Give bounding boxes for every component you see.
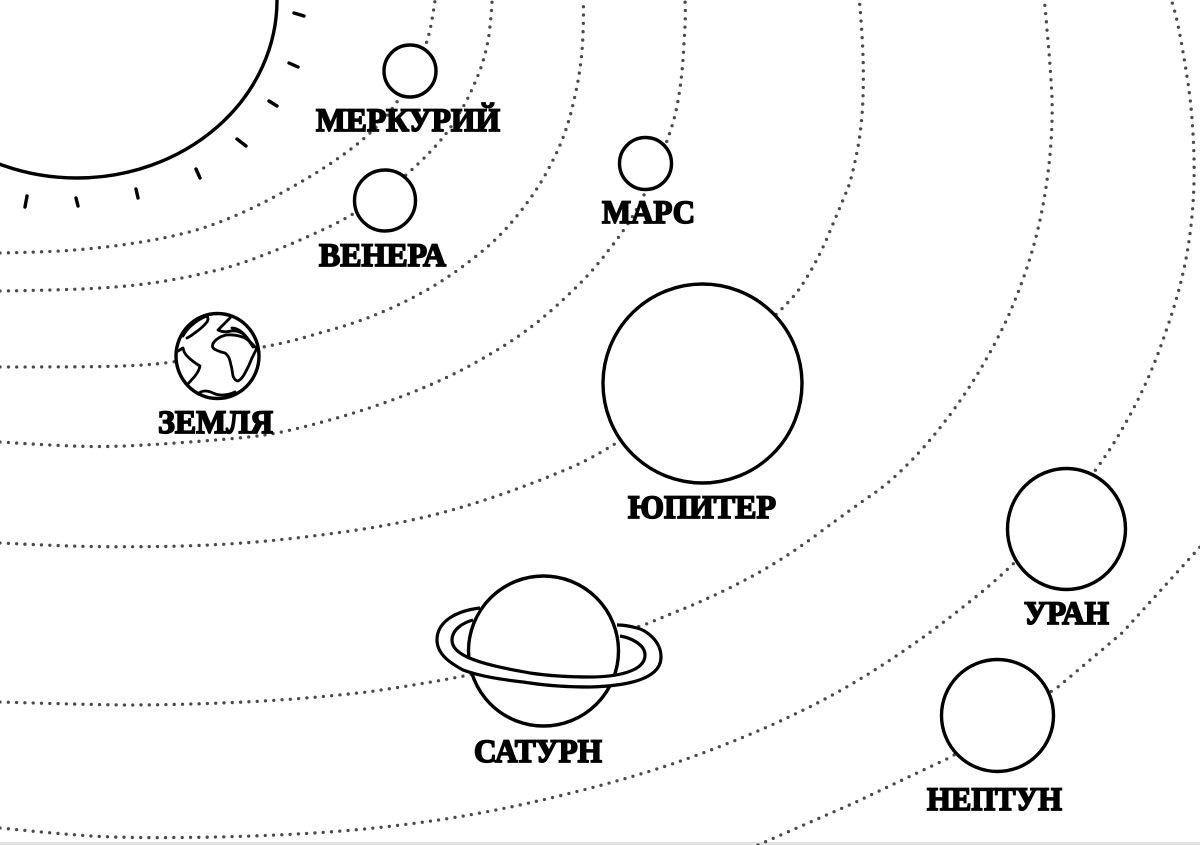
- orbit: venus: [0, 0, 492, 291]
- planet: Mars: МАРС: [602, 195, 695, 231]
- planet: Saturn: [437, 576, 661, 770]
- sun rays: [25, 13, 304, 207]
- planet: Mars: [602, 138, 695, 231]
- planet: Neptune: НЕПТУН: [927, 782, 1062, 818]
- planet: Neptune: [927, 660, 1062, 818]
- saturn ring back fill: [437, 608, 661, 687]
- planet: Jupiter: [603, 284, 802, 526]
- orbit: jupiter: [0, 0, 863, 547]
- planet: Jupiter: ЮПИТЕР: [628, 490, 776, 526]
- sun: [0, 0, 304, 207]
- saturn ring front band: [437, 608, 661, 687]
- planet: Uranus: [1008, 468, 1126, 632]
- orbit: earth: [0, 0, 584, 367]
- planet: Mercury: [316, 45, 500, 139]
- saturn ring outer edge: [437, 608, 661, 687]
- planet: Mercury: МЕРКУРИЙ: [316, 102, 500, 139]
- planet: Saturn: САТУРН: [474, 734, 602, 770]
- planet: Uranus: УРАН: [1024, 596, 1109, 632]
- saturn body: [468, 576, 618, 726]
- sun outline: [0, 0, 277, 178]
- planet: Earth: ЗЕМЛЯ: [158, 405, 273, 441]
- orbit: neptune: [758, 547, 1200, 845]
- orbit: saturn: [0, 0, 1052, 705]
- earth continents: [178, 316, 258, 395]
- earth globe: [176, 314, 259, 398]
- saturn ring inner edge: [452, 620, 645, 677]
- planet: Earth: [158, 314, 273, 441]
- planet: Venus: ВЕНЕРА: [319, 238, 446, 274]
- orbit: mercury: [0, 0, 435, 253]
- orbit: mars: [0, 0, 685, 447]
- planet: Venus: [319, 170, 446, 274]
